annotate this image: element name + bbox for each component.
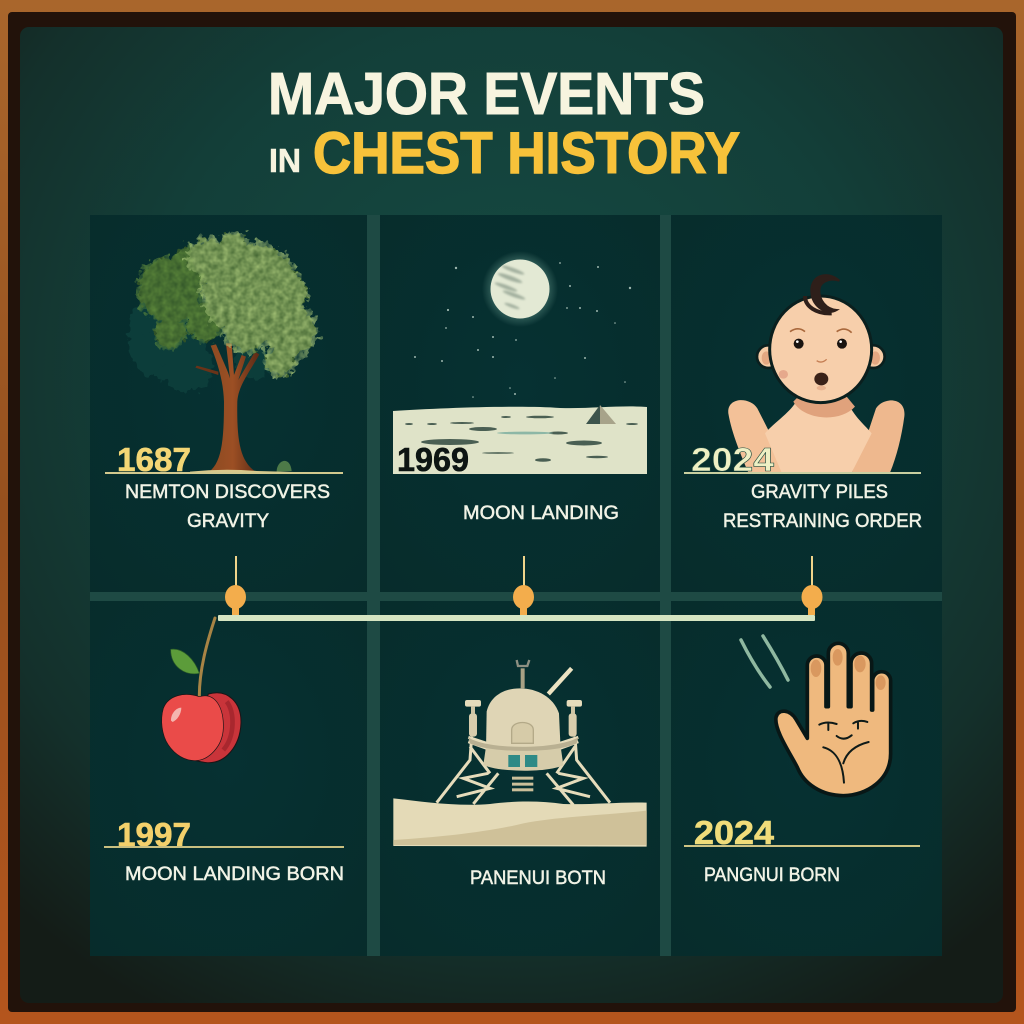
label: Gravity files restraining order xyxy=(723,482,922,532)
label: Moon landing: MOON LANDING xyxy=(463,503,619,524)
year: 1687: 1687 xyxy=(117,441,191,478)
timeline pin: left xyxy=(225,556,246,615)
panel: Gravity files restraining order xyxy=(671,215,942,592)
timeline xyxy=(218,556,822,621)
panel: Panenui born (lander) xyxy=(380,601,660,956)
title: CHEST HISTORY xyxy=(313,121,740,186)
panel: Pangnui born (hand) xyxy=(671,601,942,956)
label: Panenui born: PANENUI BOTN xyxy=(470,868,606,889)
illustration: moon xyxy=(484,253,556,325)
baseline rule xyxy=(684,472,921,474)
year: 2024: 2024 xyxy=(694,814,775,851)
illustration: stop hand xyxy=(776,643,891,796)
illustration: stars xyxy=(414,262,631,398)
illustration: lunar lander xyxy=(393,660,647,847)
panel: Moon landing born xyxy=(90,601,367,956)
title: MAJOR EVENTS xyxy=(268,61,705,127)
label: Pangnui born: PANGNUI BORN xyxy=(704,865,840,886)
illustration: baby xyxy=(728,275,904,473)
baseline rule xyxy=(684,845,920,847)
label: Newton discovers gravity: GRAVITY xyxy=(187,511,269,532)
year: 2024: 2024 xyxy=(691,441,775,478)
illustration: apple xyxy=(162,618,241,763)
title: IN xyxy=(269,142,301,179)
label: Newton discovers gravity xyxy=(125,482,330,532)
timeline pin: middle xyxy=(513,556,534,615)
illustration: tree xyxy=(128,232,318,473)
label: Gravity files restraining order: RESTRAINING ORDER xyxy=(723,511,922,532)
year: 1969: 1969 xyxy=(397,441,469,478)
label: Newton discovers gravity: NEMTON DISCOVERS xyxy=(125,482,330,503)
label: Gravity files restraining order: GRAVITY PILES xyxy=(751,482,888,503)
timeline pin: right xyxy=(802,556,822,615)
vertical and horizontal panel gutters xyxy=(90,215,942,956)
panel: Newton discovers gravity xyxy=(90,215,367,592)
title xyxy=(268,61,740,186)
label: Moon landing born: MOON LANDING BORN xyxy=(125,864,344,885)
baseline rule xyxy=(104,846,344,848)
illustration: motion lines xyxy=(741,636,788,687)
panel: Moon landing xyxy=(380,215,660,592)
year: 1997: 1997 xyxy=(117,816,191,853)
baseline rule xyxy=(105,472,343,474)
illustration: lunar surface xyxy=(393,405,647,474)
